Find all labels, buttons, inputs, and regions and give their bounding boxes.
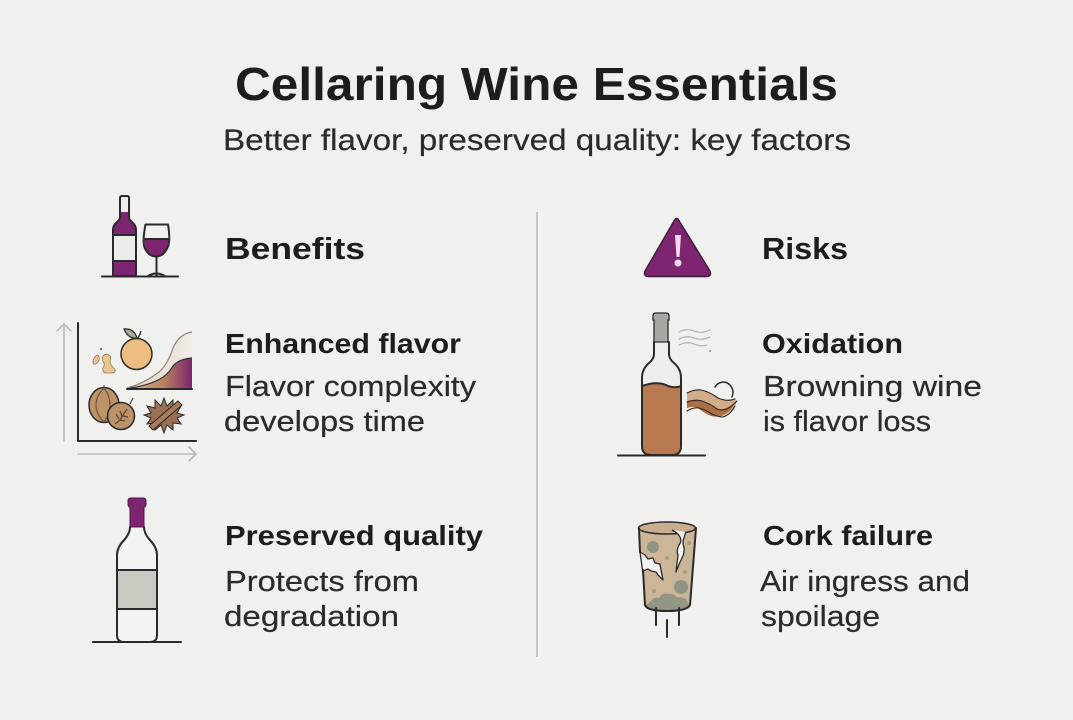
text: cork failure bbox=[760, 520, 970, 633]
text: preserved quality: degradation bbox=[224, 601, 399, 633]
text: cork failure: Air ingress and bbox=[760, 566, 970, 598]
text: oxidation: is flavor loss bbox=[763, 406, 931, 438]
text: enhanced flavor bbox=[224, 328, 477, 438]
divider bbox=[536, 212, 538, 657]
icon: oxidised bottle bbox=[618, 313, 737, 456]
text: enhanced flavor: develops time bbox=[224, 406, 425, 438]
panel: benefits bbox=[57, 196, 483, 642]
text: preserved quality: Protects from bbox=[225, 566, 419, 598]
icon: failed cork bbox=[638, 522, 696, 637]
text: cork failure: spoilage bbox=[761, 601, 880, 633]
text: cork failure: Cork failure bbox=[763, 520, 933, 551]
panel: risks bbox=[618, 218, 982, 637]
text: preserved quality: Preserved quality bbox=[225, 520, 483, 551]
icon: preserved bottle bbox=[93, 498, 181, 642]
title: Cellaring Wine Essentials bbox=[235, 58, 838, 110]
heading: risks: Risks bbox=[762, 231, 848, 266]
icon: flavor development chart bbox=[57, 323, 196, 461]
text: oxidation: Browning wine bbox=[763, 371, 982, 403]
text: oxidation: Oxidation bbox=[762, 328, 903, 359]
subtitle: Better flavor, preserved quality: key factors bbox=[223, 124, 851, 157]
text: oxidation bbox=[762, 328, 982, 438]
icon: wine bottle and glass bbox=[102, 196, 178, 276]
icon: warning triangle bbox=[644, 218, 711, 276]
text: enhanced flavor: Flavor complexity bbox=[225, 371, 477, 403]
text: enhanced flavor: Enhanced flavor bbox=[225, 328, 461, 359]
text: preserved quality bbox=[224, 520, 483, 633]
heading: benefits: Benefits bbox=[225, 231, 365, 266]
